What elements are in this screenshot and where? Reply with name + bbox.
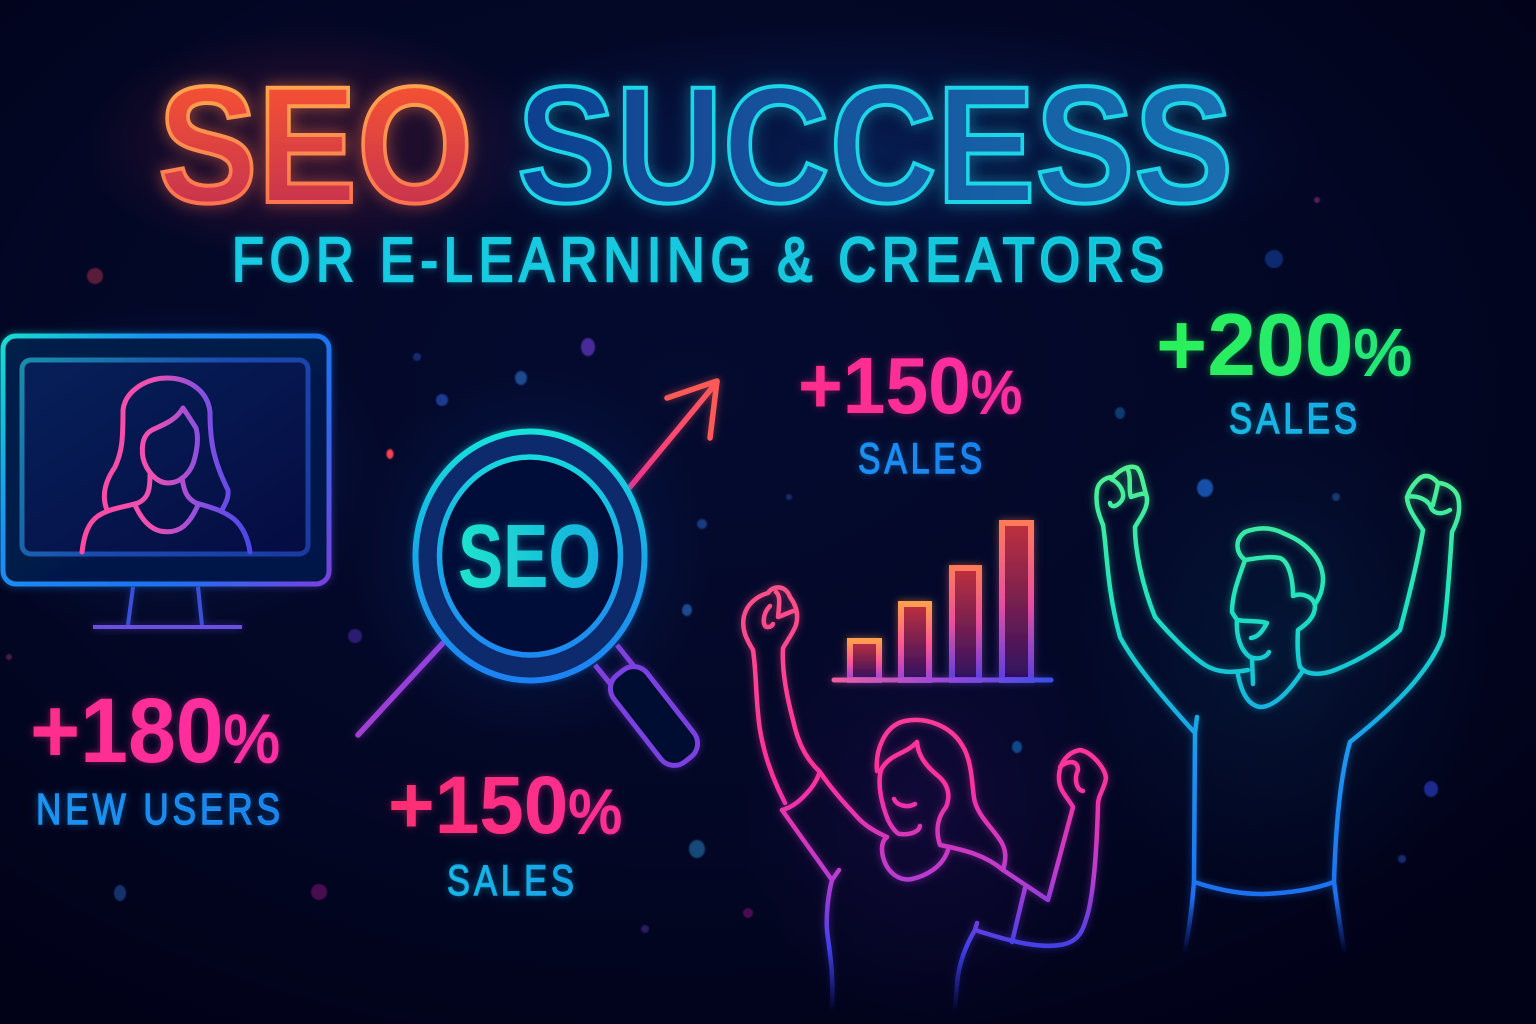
icon: magnifying glass with growth arrow [358, 381, 717, 772]
figure: celebrating man [1096, 467, 1459, 950]
monitor stand [93, 587, 242, 627]
label: SALES [858, 435, 986, 483]
bar 2 [901, 604, 929, 680]
value: +150% [798, 341, 1022, 430]
SEO text in lens: SEO [458, 507, 601, 607]
label: SALES [1229, 395, 1361, 443]
bar 3 [952, 568, 979, 680]
background dots [6, 197, 1438, 933]
stat: +180% new users [30, 680, 284, 834]
magnifier handle [595, 645, 704, 772]
stat: +150% sales upper [798, 341, 1022, 483]
magnifier lens [416, 432, 644, 680]
stat: +150% sales centre bottom [388, 760, 622, 905]
title [158, 53, 1233, 238]
bar 1 [850, 641, 879, 680]
axis [834, 678, 1051, 682]
growth arrow [358, 381, 717, 735]
label: SALES [447, 857, 578, 905]
title word: SUCCESS: SUCCESS [517, 53, 1233, 238]
value: +180% [30, 680, 280, 782]
bar chart [834, 523, 1051, 680]
value: +150% [388, 760, 622, 851]
label: NEW USERS [36, 785, 284, 834]
bar 4 [1002, 523, 1031, 680]
subtitle: FOR E-LEARNING & CREATORS [232, 226, 1170, 295]
figure: celebrating woman [743, 587, 1106, 1010]
stat: +200% sales [1156, 295, 1412, 443]
value: +200% [1156, 295, 1412, 394]
title word: SEO: SEO [158, 53, 473, 238]
icon: monitor with woman avatar [3, 336, 329, 627]
monitor frame [3, 336, 329, 584]
monitor screen [22, 360, 308, 554]
woman avatar [82, 378, 250, 552]
